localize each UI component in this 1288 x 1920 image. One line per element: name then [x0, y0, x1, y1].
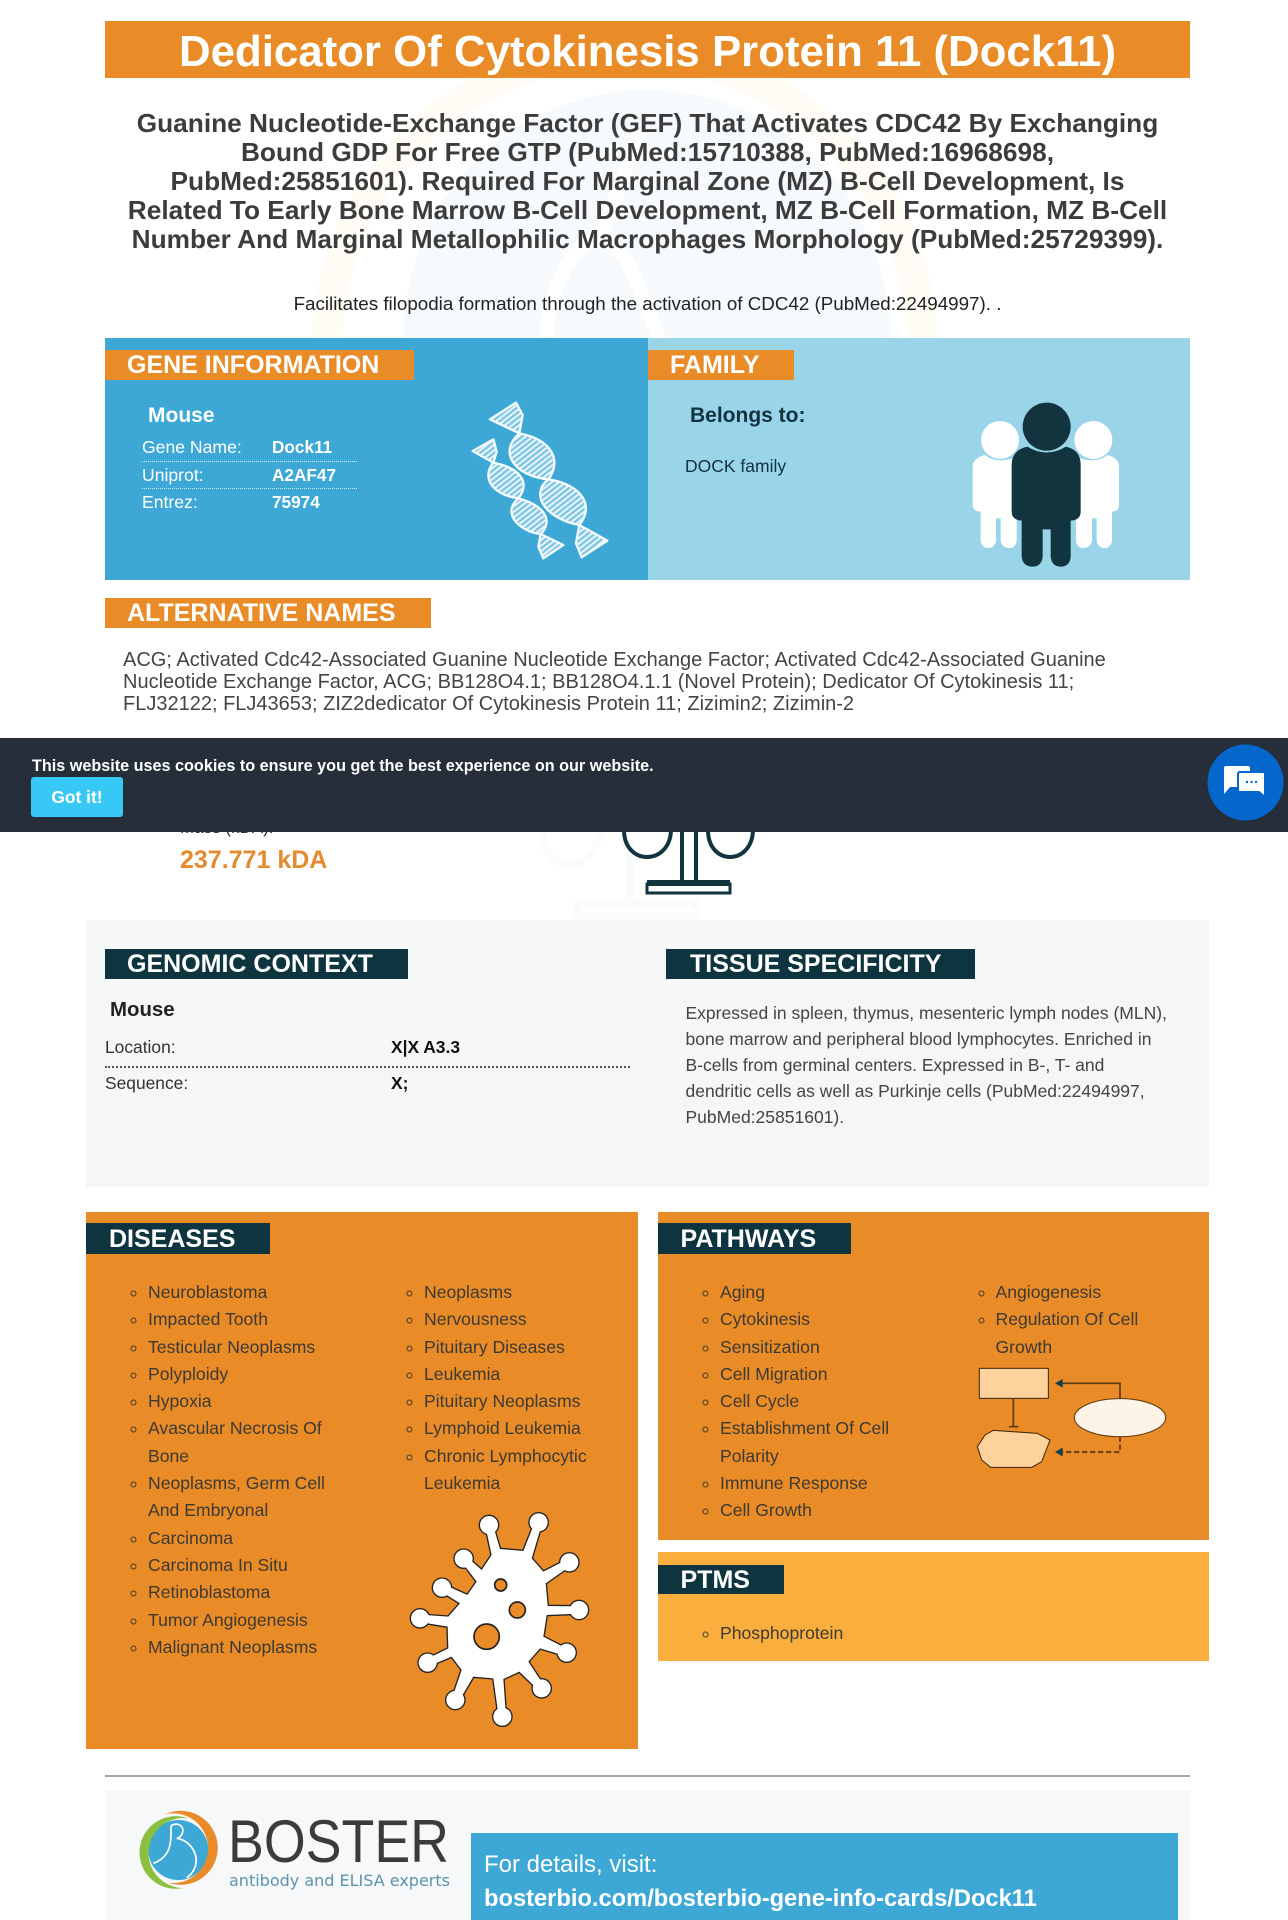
disease list column 1: Bone — [148, 1446, 189, 1466]
background watermark — [312, 78, 938, 338]
location row — [105, 1034, 630, 1068]
species label: Mouse — [110, 999, 175, 1021]
pathway list column 1: Cell Cycle — [720, 1391, 799, 1411]
heading: PTMs: PTMS — [680, 1566, 750, 1594]
tissue specificity text: B-cells from germinal centers. Expressed in B-, T- and — [686, 1055, 1104, 1075]
pathway list column 1: Immune Response — [720, 1473, 868, 1493]
molecular mass label: Mass (kDA): — [180, 818, 274, 837]
entrez row: Entrez: — [142, 492, 198, 512]
gene name row: Gene Name: — [142, 437, 242, 457]
disease list column 2: Pituitary Diseases — [424, 1337, 565, 1357]
pathway list column 2: Regulation Of Cell — [996, 1309, 1138, 1329]
disease list column 2: Nervousness — [424, 1309, 527, 1329]
icon: DNA — [472, 402, 608, 560]
disease list column 2: Chronic Lymphocytic — [424, 1446, 587, 1466]
disease list column 1: Carcinoma In Situ — [148, 1555, 288, 1575]
pathway list column 1: Aging — [720, 1282, 765, 1302]
panel: genomic context and tissue specificity — [86, 920, 1209, 1187]
cookie message: This website uses cookies to ensure you get the best experience on our website. — [32, 757, 654, 775]
disease list column 1 — [130, 1282, 325, 1657]
heading: pathways: PATHWAYS — [680, 1225, 816, 1253]
uniprot row: A2AF47 — [272, 465, 336, 485]
sequence row: Sequence: — [105, 1073, 188, 1093]
pathway list column 1: Polarity — [720, 1446, 779, 1466]
icon: balance scale — [622, 832, 755, 894]
tissue specificity text — [686, 1003, 1167, 1127]
tissue specificity text: bone marrow and peripheral blood lymphocytes. Enriched in — [686, 1029, 1151, 1049]
alternative names text: ACG; Activated Cdc42-Associated Guanine Nucleotide Exchange Factor; Activated Cdc42-Associated Guanine — [123, 649, 1106, 671]
icon: family group — [972, 402, 1119, 567]
disease list column 1: And Embryonal — [148, 1500, 268, 1520]
disease list column 2: Pituitary Neoplasms — [424, 1391, 580, 1411]
heading: diseases: DISEASES — [109, 1225, 235, 1253]
summary heading: Related To Early Bone Marrow B-Cell Development, MZ B-Cell Formation, MZ B-Cell — [128, 195, 1167, 225]
entrez row: 75974 — [272, 492, 320, 512]
button: got it: Got it! — [51, 787, 103, 807]
gene name row — [142, 434, 357, 462]
pathway list column 1: Establishment Of Cell — [720, 1418, 889, 1438]
heading: gene information: GENE INFORMATION — [127, 351, 379, 379]
disease list column 1: Carcinoma — [148, 1528, 233, 1548]
disease list column 1: Impacted Tooth — [148, 1309, 268, 1329]
disease list column 2: Lymphoid Leukemia — [424, 1418, 581, 1438]
tissue specificity text: PubMed:25851601). — [686, 1107, 844, 1127]
heading: alternative names: ALTERNATIVE NAMES — [127, 599, 396, 627]
gene name row: Dock11 — [272, 437, 332, 457]
disease list column 1: Tumor Angiogenesis — [148, 1610, 308, 1630]
pathway list column 1: Cell Migration — [720, 1364, 828, 1384]
disease list column 1: Testicular Neoplasms — [148, 1337, 315, 1357]
disease list column 2: Leukemia — [424, 1364, 500, 1384]
summary note: Facilitates filopodia formation through the activation of CDC42 (PubMed:22494997). . — [294, 293, 1001, 314]
molecular mass value: 237.771 kDA — [180, 846, 327, 874]
pathway list column 2: Angiogenesis — [996, 1282, 1101, 1302]
disease list column 2 — [406, 1282, 587, 1493]
panel: family — [648, 338, 1190, 580]
icon: pathway diagram — [976, 1368, 1166, 1468]
button: got it — [31, 777, 123, 817]
location row: Location: — [105, 1037, 176, 1057]
entrez row — [142, 492, 320, 512]
panel: diseases — [86, 1212, 638, 1749]
uniprot row: Uniprot: — [142, 465, 204, 485]
disease list column 1: Malignant Neoplasms — [148, 1637, 317, 1657]
disease list column 1: Neoplasms, Germ Cell — [148, 1473, 325, 1493]
details URL: bosterbio.com/bosterbio-gene-info-cards/Dock11 — [484, 1886, 1037, 1912]
pathway list column 2: Growth — [996, 1337, 1052, 1357]
sequence row: X; — [391, 1073, 408, 1093]
disease list column 2: Leukemia — [424, 1473, 500, 1493]
call to action box — [471, 1833, 1178, 1920]
panel: gene information — [105, 338, 648, 580]
icon: virus — [410, 1512, 590, 1727]
summary heading — [128, 108, 1167, 254]
heading: genomic context: GENOMIC CONTEXT — [127, 950, 373, 978]
disease list column 1: Hypoxia — [148, 1391, 212, 1411]
heading: family: FAMILY — [670, 351, 759, 379]
alternative names text — [123, 649, 1106, 715]
summary heading: Bound GDP For Free GTP (PubMed:15710388, PubMed:16968698, — [241, 137, 1054, 167]
uniprot row — [142, 461, 357, 489]
pathway list column 1 — [702, 1282, 889, 1520]
pathway list column 1: Sensitization — [720, 1337, 820, 1357]
alternative names text: Nucleotide Exchange Factor, ACG; BB128O4.1; BB128O4.1.1 (Novel Protein); Dedicator Of Cytokinesis 11; — [123, 671, 1074, 693]
species label: Mouse — [148, 404, 215, 427]
panel: pathways — [658, 1212, 1209, 1540]
summary heading: PubMed:25851601). Required For Marginal Zone (MZ) B-Cell Development, Is — [171, 166, 1124, 196]
panel: footer — [105, 1790, 1190, 1920]
summary heading: Number And Marginal Metallophilic Macrophages Morphology (PubMed:25729399). — [132, 224, 1163, 254]
heading: family — [648, 350, 794, 380]
disease list column 2: Neoplasms — [424, 1282, 512, 1302]
pathway list column 2 — [978, 1282, 1138, 1357]
alternative names text: FLJ32122; FLJ43653; ZIZ2dedicator Of Cytokinesis Protein 11; Zizimin2; Zizimin-2 — [123, 693, 854, 715]
heading: diseases — [86, 1223, 270, 1254]
heading: tissue specificity: TISSUE SPECIFICITY — [690, 950, 941, 978]
heading: pathways — [658, 1223, 851, 1254]
details label: For details, visit: — [484, 1851, 657, 1878]
disease list column 1: Polyploidy — [148, 1364, 228, 1384]
PTM list: Phosphoprotein — [720, 1623, 843, 1643]
panel: PTMs — [658, 1552, 1209, 1661]
logo: Boster — [140, 1808, 450, 1890]
sequence row — [105, 1073, 408, 1093]
title banner: Dedicator Of Cytokinesis Protein 11 (Dock11) — [179, 27, 1116, 76]
logo mark — [140, 1810, 218, 1889]
heading: PTMs — [658, 1565, 784, 1594]
location row: X|X A3.3 — [391, 1037, 460, 1057]
pathway list column 1: Cell Growth — [720, 1500, 812, 1520]
pathway list column 1: Cytokinesis — [720, 1309, 810, 1329]
tissue specificity text: dendritic cells as well as Purkinje cells (PubMed:22494997, — [686, 1081, 1145, 1101]
disease list column 1: Retinoblastoma — [148, 1582, 270, 1602]
disease list column 1: Neuroblastoma — [148, 1282, 267, 1302]
icon: chat button — [1208, 744, 1284, 820]
cookie banner — [0, 738, 1288, 832]
tissue specificity text: Expressed in spleen, thymus, mesenteric lymph nodes (MLN), — [686, 1003, 1167, 1023]
summary heading: Guanine Nucleotide-Exchange Factor (GEF) That Activates CDC42 By Exchanging — [137, 108, 1158, 138]
logo wordmark: antibody and ELISA experts — [229, 1871, 450, 1890]
family name: DOCK family — [685, 456, 786, 476]
belongs to label: Belongs to: — [690, 404, 806, 427]
disease list column 1: Avascular Necrosis Of — [148, 1418, 322, 1438]
